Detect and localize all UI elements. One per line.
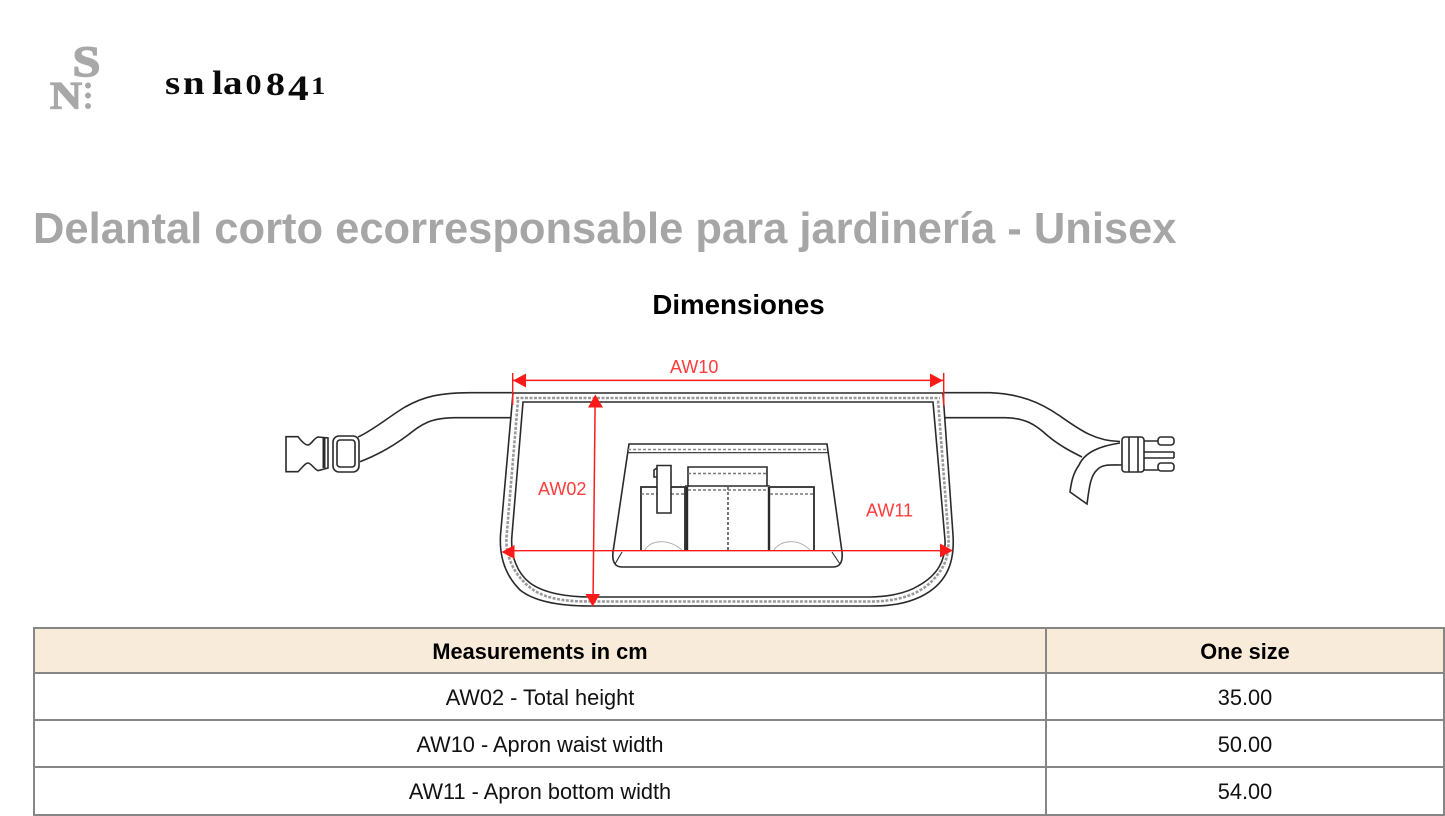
row label: AW02 [33, 672, 1047, 721]
tool loop [654, 466, 671, 513]
AW10 dimension: AW10 [670, 357, 718, 377]
AW02 dimension [538, 394, 603, 606]
apron body [500, 393, 953, 606]
logo letter S: S [72, 40, 100, 86]
product code: 8 [266, 65, 285, 102]
product code [165, 63, 325, 106]
row value: AW11 [1045, 766, 1445, 816]
section heading: Dimensiones [652, 288, 825, 320]
product code: 0 [245, 69, 262, 100]
row label: AW10: AW10 - Apron waist width [416, 732, 664, 757]
left strap and buckle [286, 393, 512, 472]
apron technical diagram [285, 357, 1175, 607]
AW02 dimension: AW02 [538, 479, 586, 499]
stitching band [506, 398, 949, 602]
measurements table [33, 627, 1445, 816]
left small pocket [641, 487, 685, 550]
centre pocket with flap [685, 467, 770, 487]
red dimension markers [502, 357, 953, 606]
row label: AW10 [33, 719, 1047, 768]
row value: AW10: 50.00 [1218, 732, 1272, 757]
table header: measurements: Measurements in cm [432, 639, 648, 664]
AW11 dimension: AW11 [866, 500, 913, 520]
AW10 dimension [512, 357, 944, 406]
title: Delantal corto ecorresponsable para jardinería - Unisex [33, 204, 1176, 252]
table header: one size: One size [1200, 639, 1290, 664]
row label: AW11: AW11 - Apron bottom width [409, 779, 671, 804]
logo: SN mark [50, 40, 100, 116]
row value: AW10 [1045, 719, 1445, 768]
product code: 1 [311, 72, 325, 100]
table header: one size [1045, 627, 1445, 674]
AW11 dimension [502, 500, 953, 559]
row label: AW11 [33, 766, 1047, 816]
front pocket [613, 444, 842, 567]
product code: snla [165, 63, 243, 101]
row value: AW02: 35.00 [1218, 685, 1272, 710]
row value: AW11: 54.00 [1218, 779, 1272, 804]
logo dots [85, 82, 91, 109]
row value: AW02 [1045, 672, 1445, 721]
table header: measurements [33, 627, 1047, 674]
row label: AW02: AW02 - Total height [446, 685, 634, 710]
right small pocket [770, 487, 814, 550]
right strap and buckle [944, 393, 1174, 504]
